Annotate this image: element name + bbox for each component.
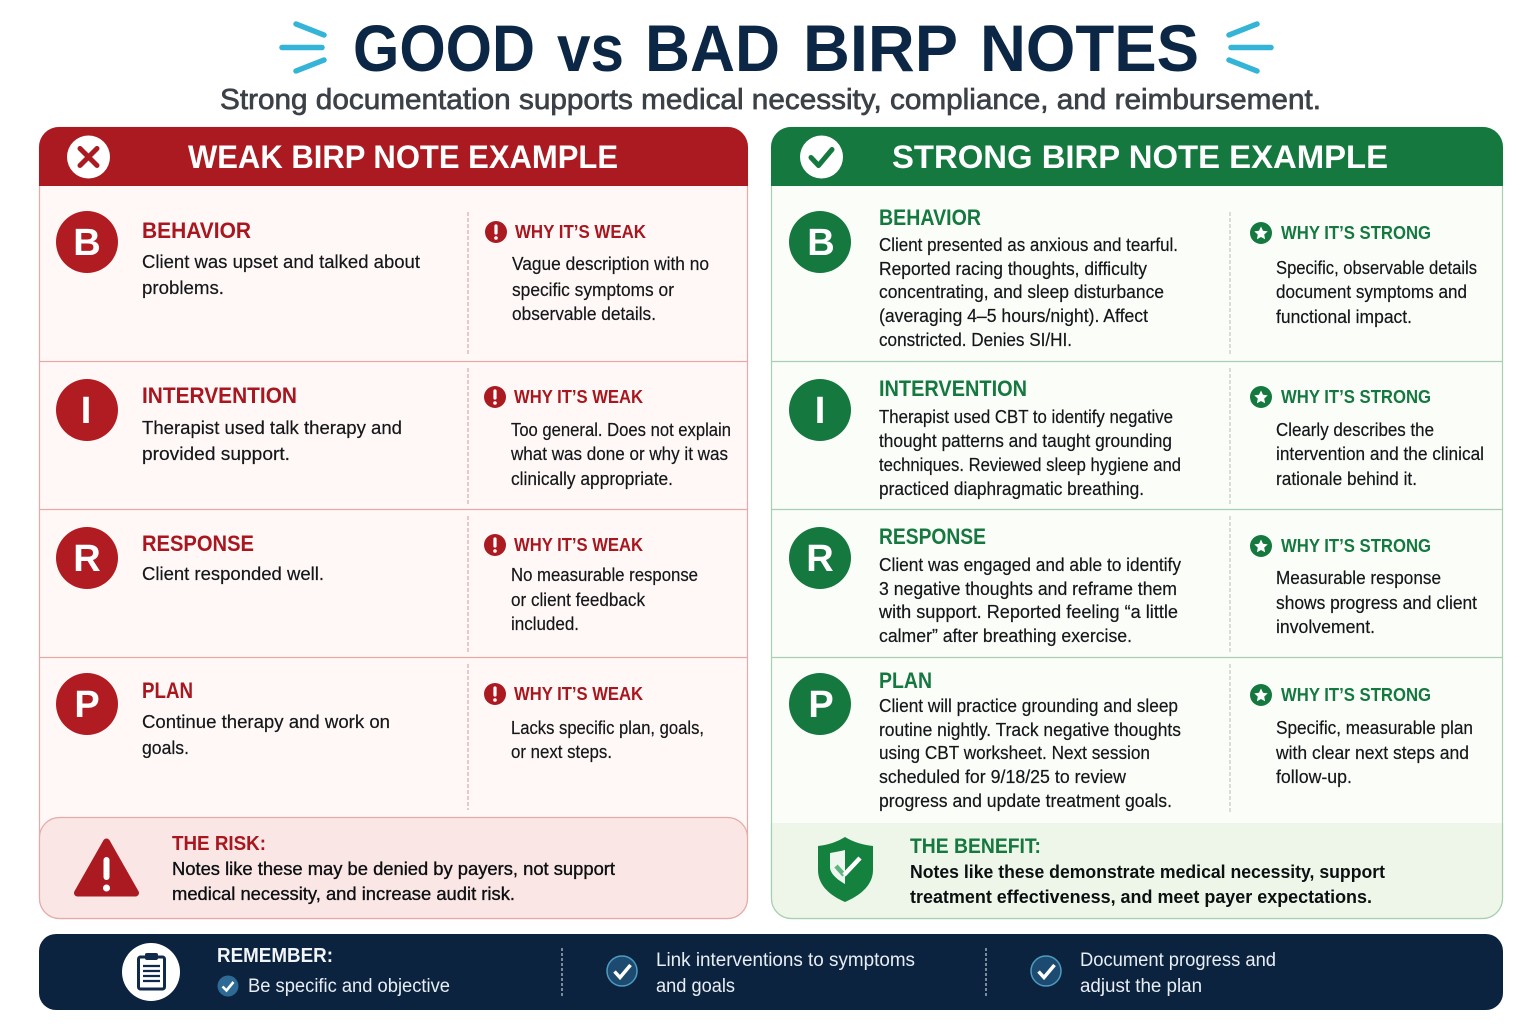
row: weak behavior: BEHAVIOR bbox=[142, 218, 251, 243]
row: weak behavior bbox=[56, 211, 709, 355]
row: weak behavior: B bbox=[73, 222, 101, 264]
item: link interventions: and goals bbox=[656, 976, 735, 997]
callout: the risk bbox=[40, 818, 748, 918]
row: strong plan bbox=[789, 664, 1473, 812]
row: weak plan: Lacks specific plan, goals, bbox=[511, 717, 704, 738]
row: weak response: No measurable response bbox=[511, 564, 698, 585]
row: weak response: included. bbox=[511, 613, 579, 634]
row: strong response: calmer” after breathing exercise. bbox=[879, 625, 1132, 646]
row: strong intervention: techniques. Reviewed sleep hygiene and bbox=[879, 454, 1181, 475]
row: weak intervention: what was done or why it was bbox=[510, 443, 728, 464]
row: strong intervention: rationale behind it. bbox=[1276, 468, 1417, 489]
row: weak intervention: I bbox=[81, 390, 91, 432]
callout: the benefit: Notes like these demonstrate medical necessity, support bbox=[910, 861, 1385, 882]
title bbox=[353, 11, 1199, 85]
row: strong behavior: Reported racing thoughts, difficulty bbox=[879, 258, 1148, 279]
row: strong plan: P bbox=[808, 684, 834, 726]
row: weak plan: or next steps. bbox=[511, 741, 612, 762]
row: strong response bbox=[789, 516, 1477, 653]
panel header: strong bbox=[771, 127, 1503, 186]
row: weak response: or client feedback bbox=[511, 589, 646, 610]
row: strong behavior: constricted. Denies SI/HI. bbox=[879, 329, 1072, 350]
callout: the benefit bbox=[772, 823, 1502, 918]
row: weak plan: PLAN bbox=[142, 678, 193, 703]
row: strong response: Measurable response bbox=[1276, 567, 1441, 588]
row: weak plan: WHY IT’S WEAK bbox=[514, 684, 643, 704]
callout: the benefit: treatment effectiveness, and meet payer expectations. bbox=[910, 886, 1372, 907]
row: weak behavior: problems. bbox=[142, 277, 224, 298]
title: BIRP bbox=[803, 11, 958, 85]
row: strong response: RESPONSE bbox=[879, 524, 986, 549]
row: weak response: Client responded well. bbox=[142, 563, 324, 584]
heading: remember: REMEMBER: bbox=[217, 945, 333, 967]
row: strong plan: using CBT worksheet. Next session bbox=[879, 742, 1150, 763]
row: strong behavior: B bbox=[807, 222, 835, 264]
row: strong behavior: Client presented as anxious and tearful. bbox=[879, 234, 1178, 255]
row: weak behavior: WHY IT’S WEAK bbox=[515, 222, 646, 242]
row: weak intervention: INTERVENTION bbox=[142, 383, 297, 408]
icon: clipboard bbox=[122, 943, 180, 1001]
row: strong plan: scheduled for 9/18/25 to review bbox=[879, 766, 1127, 787]
row: strong plan: with clear next steps and bbox=[1275, 742, 1469, 763]
row: weak behavior: observable details. bbox=[512, 303, 656, 324]
row: strong intervention: intervention and the clinical bbox=[1276, 443, 1484, 464]
row: strong intervention: WHY IT’S STRONG bbox=[1281, 387, 1431, 407]
row: strong intervention bbox=[789, 368, 1484, 505]
row: weak response: RESPONSE bbox=[142, 531, 254, 556]
row: weak intervention: clinically appropriate. bbox=[511, 468, 673, 489]
row: strong intervention: Clearly describes the bbox=[1276, 419, 1434, 440]
row: strong behavior: BEHAVIOR bbox=[879, 205, 981, 230]
row: weak plan bbox=[56, 664, 704, 810]
row: strong response: with support. Reported feeling “a little bbox=[878, 601, 1178, 622]
row: weak plan: goals. bbox=[142, 737, 189, 758]
row: weak behavior: specific symptoms or bbox=[512, 279, 674, 300]
row: strong behavior bbox=[789, 205, 1477, 355]
row: weak behavior: Client was upset and talked about bbox=[142, 251, 420, 272]
row: strong intervention: I bbox=[815, 390, 825, 432]
item: be specific and objective: Be specific and objective bbox=[248, 976, 450, 997]
row: weak intervention: Too general. Does not explain bbox=[511, 419, 731, 440]
row: strong plan: progress and update treatment goals. bbox=[879, 790, 1172, 811]
row: strong intervention: INTERVENTION bbox=[879, 376, 1027, 401]
title: BAD bbox=[645, 11, 780, 85]
row: weak response: WHY IT’S WEAK bbox=[514, 535, 643, 555]
panel header: strong: STRONG BIRP NOTE EXAMPLE bbox=[892, 139, 1388, 175]
row: weak intervention: WHY IT’S WEAK bbox=[514, 387, 643, 407]
row: strong behavior: Specific, observable details bbox=[1276, 257, 1477, 278]
row: weak plan: Continue therapy and work on bbox=[142, 711, 390, 732]
subtitle: Strong documentation supports medical necessity, compliance, and reimbursement. bbox=[220, 84, 1321, 116]
callout: the benefit: THE BENEFIT: bbox=[910, 835, 1041, 858]
row: strong response: WHY IT’S STRONG bbox=[1281, 536, 1431, 556]
row: strong intervention: thought patterns and taught grounding bbox=[879, 430, 1172, 451]
icon: left title accent bbox=[282, 24, 324, 71]
panel header: weak bbox=[39, 127, 748, 186]
row: weak intervention: provided support. bbox=[142, 443, 290, 464]
row: weak response bbox=[56, 516, 698, 653]
item: link interventions: Link interventions to symptoms bbox=[656, 950, 915, 971]
row: strong intervention: practiced diaphragmatic breathing. bbox=[879, 478, 1144, 499]
row: strong behavior: document symptoms and bbox=[1276, 281, 1467, 302]
row: strong plan: routine nightly. Track negative thoughts bbox=[879, 719, 1181, 740]
panel header: weak: WEAK BIRP NOTE EXAMPLE bbox=[188, 139, 618, 175]
row: strong response: involvement. bbox=[1276, 616, 1375, 637]
panel: strong BIRP note example bbox=[771, 127, 1503, 918]
row: strong plan: follow-up. bbox=[1276, 766, 1352, 787]
row: strong response: Client was engaged and able to identify bbox=[879, 554, 1182, 575]
title: GOOD bbox=[353, 11, 535, 85]
row: weak behavior: Vague description with no bbox=[512, 253, 709, 274]
footer: remember bar bbox=[39, 934, 1503, 1010]
item: document progress bbox=[1031, 950, 1276, 997]
row: strong behavior: concentrating, and sleep disturbance bbox=[879, 281, 1164, 302]
callout: the risk: THE RISK: bbox=[172, 833, 266, 855]
item: document progress: adjust the plan bbox=[1080, 976, 1202, 997]
icon: right title accent bbox=[1229, 24, 1271, 71]
row: strong plan: WHY IT’S STRONG bbox=[1281, 685, 1431, 705]
row: weak plan: P bbox=[74, 684, 100, 726]
callout: the risk: Notes like these may be denied by payers, not support bbox=[172, 858, 615, 879]
row: strong response: R bbox=[806, 538, 834, 580]
row: strong intervention: Therapist used CBT to identify negative bbox=[879, 406, 1173, 427]
row: strong behavior: (averaging 4–5 hours/night). Affect bbox=[879, 305, 1148, 326]
row: strong plan: Specific, measurable plan bbox=[1276, 717, 1473, 738]
row: weak response: R bbox=[73, 538, 101, 580]
row: weak intervention: Therapist used talk therapy and bbox=[142, 417, 402, 438]
row: strong plan: PLAN bbox=[879, 668, 932, 693]
title: vs bbox=[557, 11, 624, 85]
row: strong response: shows progress and client bbox=[1276, 592, 1477, 613]
item: link interventions bbox=[607, 950, 915, 997]
panel: weak BIRP note example bbox=[39, 127, 748, 918]
row: strong behavior: WHY IT’S STRONG bbox=[1281, 223, 1431, 243]
item: document progress: Document progress and bbox=[1080, 950, 1276, 971]
row: strong response: 3 negative thoughts and reframe them bbox=[879, 578, 1177, 599]
row: strong behavior: functional impact. bbox=[1276, 306, 1412, 327]
title: NOTES bbox=[980, 11, 1199, 85]
row: strong plan: Client will practice grounding and sleep bbox=[879, 695, 1178, 716]
callout: the risk: medical necessity, and increase audit risk. bbox=[172, 883, 515, 904]
row: weak intervention bbox=[56, 368, 731, 505]
